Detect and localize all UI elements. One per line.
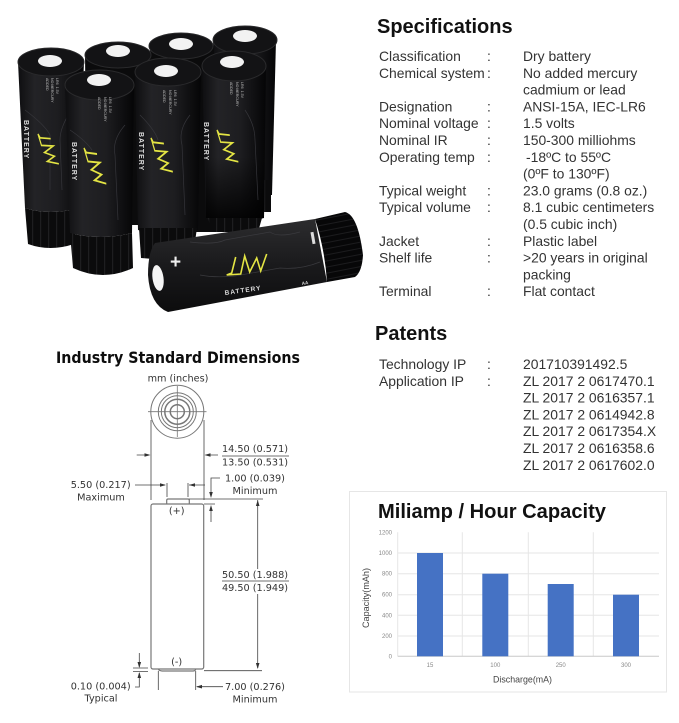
battery: front row far left: NO MERCURY bbox=[50, 78, 54, 103]
patent list: ZL 2017 2 0616358.6 bbox=[523, 440, 655, 456]
battery: middle right bbox=[202, 51, 266, 232]
spec table: Jacket bbox=[379, 233, 419, 249]
battery: front left: BATTERY bbox=[70, 142, 77, 181]
battery: lying in front: BATTERY bbox=[224, 285, 262, 297]
spec table: Typical weight bbox=[379, 182, 466, 198]
bar chart bbox=[361, 530, 659, 686]
heading: dimensions: Industry Standard Dimensions bbox=[56, 348, 300, 367]
battery: front left: ADDED bbox=[97, 97, 101, 110]
bar: 300 mA bbox=[613, 595, 639, 656]
spec table: (0.5 cubic inch) bbox=[523, 216, 617, 232]
spec table: : bbox=[487, 48, 491, 64]
spec table: : bbox=[487, 98, 491, 114]
dimension: diameter: 14.50 (0.571) bbox=[222, 444, 288, 455]
battery: middle centre: NO MERCURY bbox=[168, 90, 172, 115]
spec table: Nominal IR bbox=[379, 132, 448, 148]
dimension lines and arrows bbox=[133, 420, 289, 690]
spec table: -18ºC to 55ºC bbox=[526, 149, 611, 165]
dimension: base offset bbox=[71, 682, 131, 705]
spec table: : bbox=[487, 250, 491, 266]
patent list bbox=[379, 356, 656, 473]
spec table: Nominal voltage bbox=[379, 115, 479, 131]
patent list: Technology IP bbox=[379, 356, 466, 372]
dimension: diameter: 13.50 (0.531) bbox=[222, 458, 288, 469]
patent list: ZL 2017 2 0616357.1 bbox=[523, 390, 655, 406]
battery side view bbox=[151, 499, 204, 671]
battery: front row far left: ADDED bbox=[45, 78, 49, 91]
y axis ticks: 0 bbox=[389, 654, 393, 660]
spec table: Terminal bbox=[379, 283, 432, 299]
spec table: : bbox=[487, 199, 491, 215]
terminal labels bbox=[169, 506, 185, 668]
spec table: Operating temp bbox=[379, 149, 475, 165]
panel: battery product photo bbox=[18, 26, 363, 312]
dimension: terminal height bbox=[225, 474, 285, 497]
y axis ticks: 1200 bbox=[379, 530, 393, 536]
dimension: base offset: 0.10 (0.004) bbox=[71, 682, 131, 692]
spec table: Designation bbox=[379, 98, 452, 114]
bar: 100 mA bbox=[482, 574, 508, 656]
dimension: length: 49.50 (1.949) bbox=[222, 583, 288, 594]
dimension: base width: Minimum bbox=[233, 695, 277, 706]
battery: front row far left bbox=[18, 48, 84, 248]
spec table: cadmium or lead bbox=[523, 82, 626, 98]
spec table: packing bbox=[523, 266, 571, 282]
terminal labels: (+) bbox=[169, 506, 185, 517]
battery: front row far left: BATTERY bbox=[22, 120, 29, 159]
y axis ticks: 200 bbox=[382, 634, 393, 640]
terminal labels: (-) bbox=[171, 657, 182, 668]
battery: back row far right bbox=[213, 26, 277, 212]
chart title: Miliamp / Hour Capacity bbox=[378, 501, 607, 523]
spec table: : bbox=[487, 182, 491, 198]
spec table: ANSI-15A, IEC-LR6 bbox=[523, 98, 646, 114]
battery: lying in front bbox=[148, 212, 363, 312]
battery: back row third bbox=[149, 33, 214, 232]
x axis ticks bbox=[427, 663, 632, 669]
spec table: : bbox=[487, 149, 491, 165]
spec table: >20 years in original bbox=[523, 250, 648, 266]
chart frame bbox=[350, 492, 666, 692]
spec table: (0ºF to 130ºF) bbox=[523, 166, 610, 182]
x axis ticks: 250 bbox=[556, 663, 566, 669]
dimension: length: 50.50 (1.988) bbox=[222, 570, 288, 581]
x axis ticks: 100 bbox=[490, 663, 501, 669]
battery: middle centre: LR6 1.5V bbox=[173, 90, 177, 107]
patent list: 201710391492.5 bbox=[523, 356, 628, 372]
patent list: ZL 2017 2 0617602.0 bbox=[523, 457, 655, 473]
panel: specifications bbox=[377, 16, 654, 299]
spec table: No added mercury bbox=[523, 65, 637, 81]
spec table: Plastic label bbox=[523, 233, 597, 249]
panel: industry standard dimensions diagram bbox=[56, 348, 300, 706]
spec table: Typical volume bbox=[379, 199, 471, 215]
dimension: terminal width bbox=[71, 480, 131, 504]
panel: patents bbox=[375, 323, 656, 473]
spec table: : bbox=[487, 115, 491, 131]
dimension: terminal height: Minimum bbox=[233, 486, 277, 497]
dimension: terminal width: Maximum bbox=[77, 492, 125, 504]
y axis title: Capacity(mAh) bbox=[361, 568, 372, 628]
spec table: Shelf life bbox=[379, 250, 433, 266]
battery: middle right: ADDED bbox=[229, 82, 233, 95]
spec table: : bbox=[487, 65, 491, 81]
patent list: ZL 2017 2 0617470.1 bbox=[523, 373, 655, 389]
x axis ticks: 300 bbox=[621, 663, 632, 669]
bar: 15 mA bbox=[417, 553, 443, 656]
spec table: Flat contact bbox=[523, 283, 595, 299]
patent list: Application IP bbox=[379, 373, 464, 389]
spec table: 8.1 cubic centimeters bbox=[523, 199, 654, 215]
battery: middle right: BATTERY bbox=[202, 122, 209, 161]
dimension: diameter bbox=[222, 444, 288, 469]
spec table: : bbox=[487, 233, 491, 249]
dimension: terminal width: 5.50 (0.217) bbox=[71, 480, 131, 491]
spec table: 1.5 volts bbox=[523, 115, 575, 131]
spec table: : bbox=[487, 132, 491, 148]
dimension: base width bbox=[225, 682, 285, 706]
battery: middle right: LR6 1.5V bbox=[240, 82, 244, 99]
y axis ticks: 1000 bbox=[379, 551, 393, 557]
dimension: base offset: Typical bbox=[84, 694, 117, 705]
y axis ticks: 600 bbox=[382, 593, 393, 599]
battery: front left: NO MERCURY bbox=[103, 97, 107, 122]
dimension: terminal height: 1.00 (0.039) bbox=[225, 474, 285, 485]
patent list: : bbox=[487, 373, 491, 389]
dimension: length bbox=[222, 570, 288, 594]
x axis title: Discharge(mA) bbox=[493, 675, 552, 686]
units label: mm (inches) bbox=[148, 374, 208, 385]
spec table: Chemical system bbox=[379, 65, 485, 81]
spec table: 23.0 grams (0.8 oz.) bbox=[523, 182, 647, 198]
heading: specifications: Specifications bbox=[377, 16, 513, 38]
battery: front row far left: LR6 1.5V bbox=[55, 78, 59, 95]
patent list: : bbox=[487, 356, 491, 372]
spec table: 150-300 milliohms bbox=[523, 132, 636, 148]
y axis ticks bbox=[379, 530, 393, 660]
battery: back row second bbox=[85, 42, 151, 225]
y axis ticks: 400 bbox=[382, 613, 393, 619]
battery end view bbox=[148, 385, 206, 438]
dimension: base width: 7.00 (0.276) bbox=[225, 682, 285, 693]
spec table bbox=[379, 48, 654, 299]
patent list: ZL 2017 2 0617354.X bbox=[523, 423, 656, 439]
patent list: ZL 2017 2 0614942.8 bbox=[523, 406, 655, 422]
battery: front left bbox=[65, 70, 134, 275]
battery: middle centre: BATTERY bbox=[137, 132, 144, 171]
arrowheads bbox=[138, 453, 260, 688]
spec table: Dry battery bbox=[523, 48, 591, 64]
panel: capacity chart bbox=[350, 492, 666, 692]
spec table: : bbox=[487, 283, 491, 299]
battery: middle centre: ADDED bbox=[162, 90, 166, 103]
battery: middle right: NO MERCURY bbox=[235, 82, 239, 107]
battery: front left: LR6 1.5V bbox=[108, 97, 112, 114]
battery: lying in front: + bbox=[170, 252, 181, 273]
bar: 250 mA bbox=[548, 584, 574, 656]
heading: patents: Patents bbox=[375, 323, 447, 345]
y axis ticks: 800 bbox=[382, 572, 393, 578]
spec table: Classification bbox=[379, 48, 461, 64]
x axis ticks: 15 bbox=[427, 663, 434, 669]
battery: middle centre bbox=[135, 58, 201, 262]
battery: lying in front: AA bbox=[301, 280, 309, 286]
